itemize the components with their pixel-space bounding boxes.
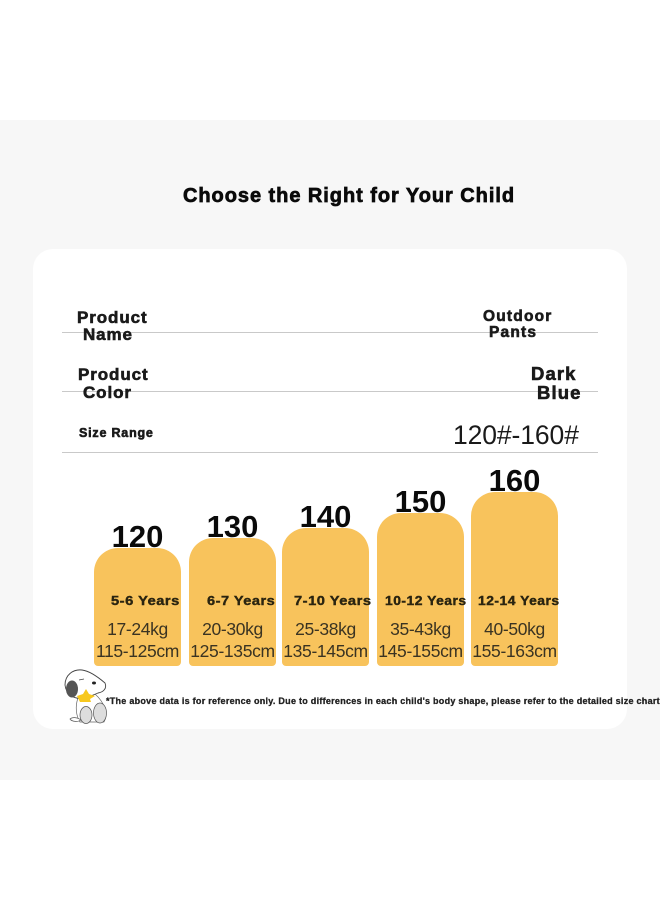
disclaimer note: *The above data is for reference only. Due to differences in each child's body shape, please refer to the detailed size chart [106, 696, 660, 706]
weight and height [283, 619, 368, 660]
weight and height: 35-43kg [390, 619, 451, 639]
bar shape [471, 492, 558, 666]
bar: size 150 [377, 484, 467, 666]
bar shape [377, 513, 464, 666]
bar: size 160 [471, 463, 560, 666]
divider: size range [62, 452, 598, 453]
age: 12-14 Years [478, 593, 560, 608]
age: 7-10 Years [294, 593, 372, 608]
divider: product color [62, 391, 598, 392]
grey background panel [0, 120, 660, 780]
bar shape [94, 548, 181, 666]
divider: product name [62, 332, 598, 333]
weight and height: 25-38kg [295, 619, 356, 639]
weight and height [190, 619, 275, 660]
size number: 120 [112, 519, 163, 554]
weight and height: 125-135cm [190, 640, 275, 660]
weight and height: 17-24kg [107, 619, 168, 639]
title: Choose the Right for Your Child [183, 185, 515, 207]
age: 10-12 Years [385, 593, 467, 608]
value: outdoor pants: Pants [489, 324, 537, 341]
value: dark blue: Blue [537, 382, 582, 402]
weight and height: 145-155cm [378, 640, 463, 660]
label: product name: Name [83, 325, 133, 344]
label: product color: Product [78, 365, 149, 384]
size number: 130 [207, 509, 258, 544]
weight and height: 155-163cm [472, 640, 557, 660]
value: size range: 120#-160# [453, 420, 579, 450]
label: product name [77, 308, 148, 344]
value: dark blue [531, 363, 582, 402]
weight and height [472, 619, 557, 660]
label: product color [78, 365, 149, 402]
weight and height: 40-50kg [484, 619, 545, 639]
size number: 150 [395, 484, 446, 519]
bar: size 130 [189, 509, 276, 666]
weight and height: 20-30kg [202, 619, 263, 639]
weight and height: 115-125cm [96, 640, 179, 660]
weight and height [378, 619, 463, 660]
panel: size card [33, 249, 627, 729]
label: product color: Color [83, 383, 132, 402]
size number: 160 [489, 463, 540, 498]
value: dark blue: Dark [531, 363, 577, 384]
weight and height [96, 619, 179, 660]
weight and height: 135-145cm [283, 640, 368, 660]
bar shape [189, 538, 276, 666]
label: product name: Product [77, 308, 148, 327]
age: 6-7 Years [207, 593, 275, 608]
bar: size 120 [94, 519, 181, 666]
label: size range: Size Range [79, 426, 154, 440]
value: outdoor pants: Outdoor [483, 308, 553, 325]
bar shape [282, 528, 369, 666]
value: outdoor pants [483, 308, 553, 341]
icon: snoopy hugging woodstock [64, 669, 107, 724]
size number: 140 [300, 499, 351, 534]
bar: size 140 [282, 499, 372, 666]
age: 5-6 Years [111, 593, 180, 608]
